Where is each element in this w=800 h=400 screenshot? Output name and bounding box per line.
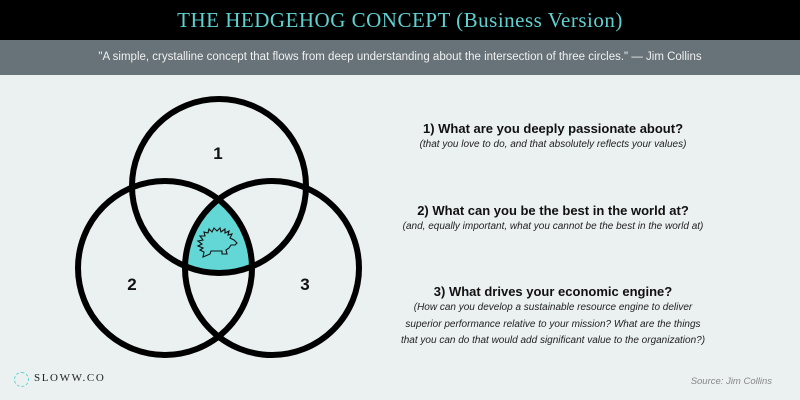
quote bar	[0, 40, 800, 75]
question 3	[401, 284, 705, 346]
question 3: 3) What drives your economic engine?	[434, 284, 672, 299]
question 3: superior performance relative to your mission? What are the things	[405, 318, 701, 330]
circles	[78, 99, 359, 355]
quote bar: "A simple, crystalline concept that flows from deep understanding about the intersection of three circles." — Jim Collins	[98, 51, 702, 63]
question 1	[420, 121, 686, 150]
question 3: that you can do that would add significant value to the organization?)	[401, 335, 705, 346]
question 2: (and, equally important, what you cannot be the best in the world at)	[403, 221, 703, 232]
source: Source: Jim Collins	[691, 376, 772, 387]
header bar	[0, 0, 800, 40]
question 2: 2) What can you be the best in the world at?	[417, 203, 689, 218]
question 1: 1) What are you deeply passionate about?	[423, 121, 683, 136]
intersection fill	[188, 203, 249, 270]
question 1: (that you love to do, and that absolutely reflects your values)	[420, 139, 686, 150]
labels: 2	[127, 275, 137, 294]
venn diagram	[75, 96, 362, 358]
labels: 3	[300, 275, 310, 294]
title: THE HEDGEHOG CONCEPT (Business Version)	[177, 8, 623, 32]
logo: SLOWW.CO	[34, 372, 105, 384]
icon: hedgehog	[198, 228, 237, 257]
logo	[14, 372, 105, 387]
labels: 1	[213, 144, 223, 163]
question 3: (How can you develop a sustainable resource engine to deliver	[414, 302, 692, 313]
question 2	[403, 203, 703, 232]
labels	[127, 144, 310, 294]
